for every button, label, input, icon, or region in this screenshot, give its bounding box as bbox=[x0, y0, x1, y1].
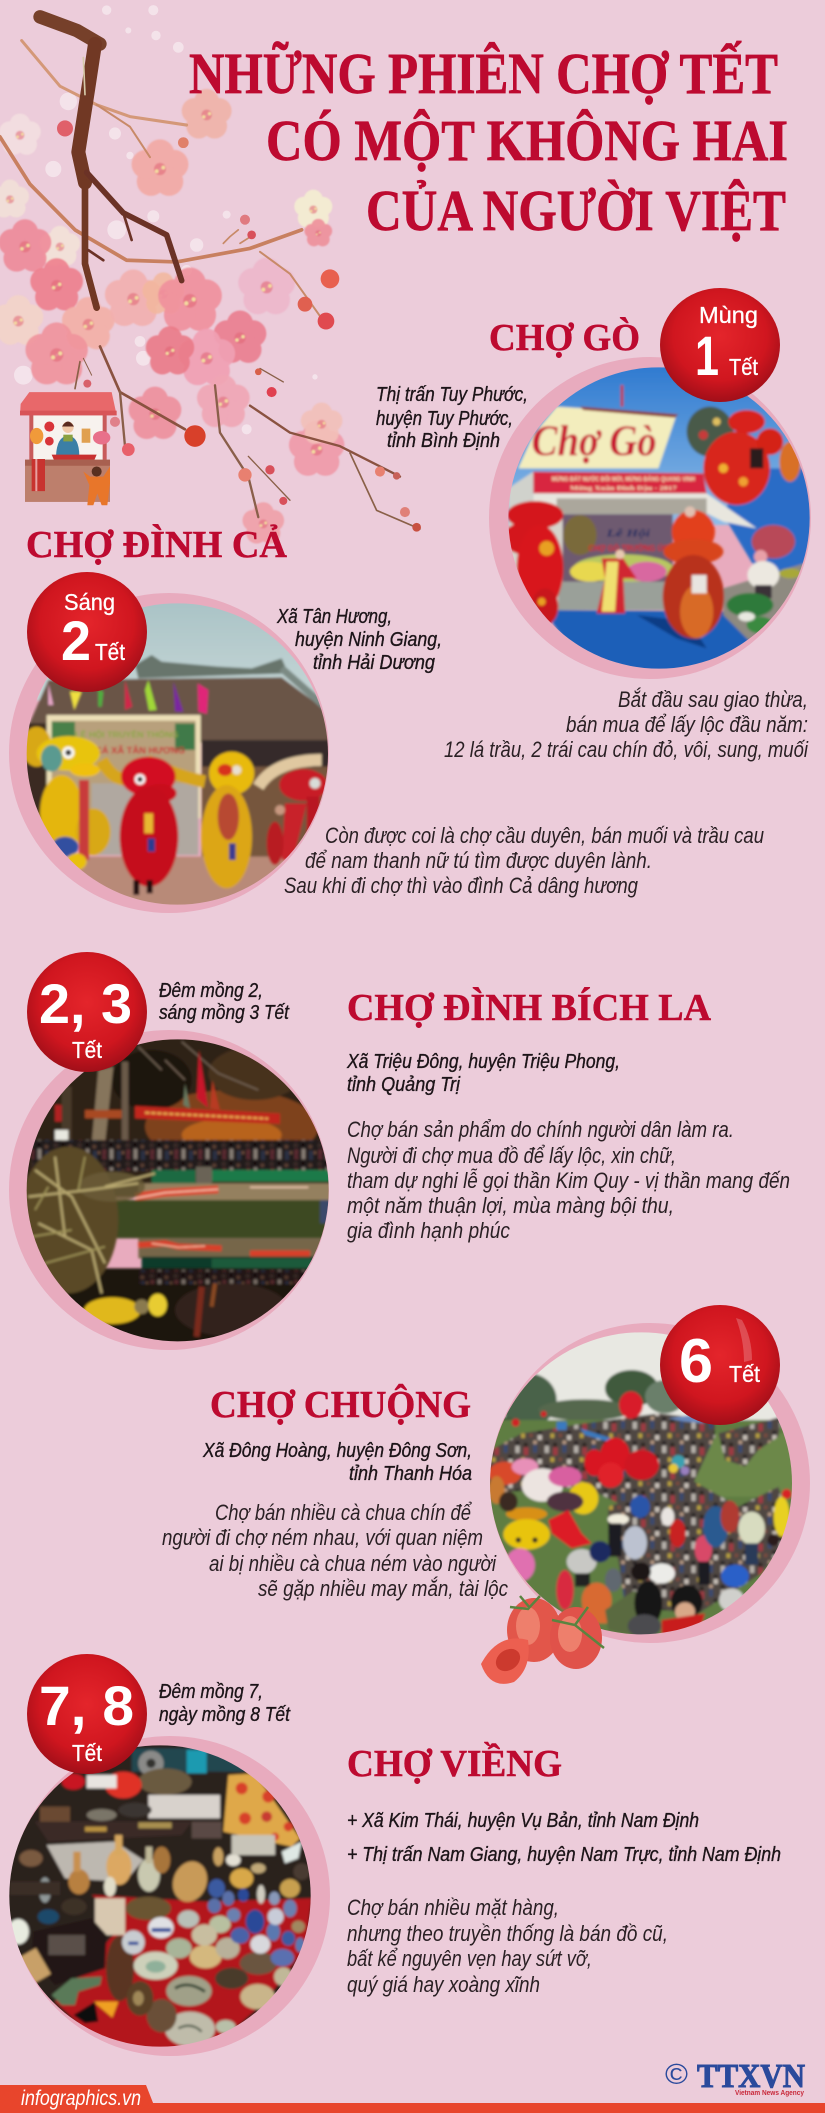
illustration: peach blossom branch bbox=[0, 5, 421, 544]
white speckles bbox=[14, 5, 318, 434]
photo ring: Chợ Viềng bbox=[10, 1736, 330, 2056]
description: Chợ Viềng bbox=[347, 1895, 668, 1997]
photo: Chợ Đình Bích La night market bbox=[18, 1037, 335, 1348]
address: Chợ Đình Cá bbox=[276, 606, 442, 674]
photo: Chợ Gò lion dance: MỪNG ĐẤT NƯỚC ĐỔI MỚI, MỪNG ĐẢNG QUANG VINH bbox=[552, 475, 695, 483]
photo ring: Chợ Đình Cá bbox=[9, 593, 329, 913]
heading: Chợ Gò: CHỢ GÒ bbox=[489, 317, 640, 359]
address: Chợ Gò: Thị trấn Tuy Phước, bbox=[376, 384, 528, 406]
address: Chợ Viềng: + Thị trấn Nam Giang, huyện Nam Trực, tỉnh Nam Định bbox=[347, 1844, 781, 1866]
description: Chợ Gò bbox=[444, 687, 809, 762]
description: Chợ Chuộng: sẽ gặp nhiều may mắn, tài lộc bbox=[258, 1576, 508, 1601]
date note: Chợ Viềng bbox=[159, 1681, 291, 1726]
heading: Chợ Viềng: CHỢ VIỀNG bbox=[347, 1742, 562, 1785]
description: Chợ Đình Bích La: gia đình hạnh phúc bbox=[347, 1218, 510, 1243]
description: Chợ Đình Bích La: Chợ bán sản phẩm do chính người dân làm ra. bbox=[347, 1117, 734, 1142]
photo: Chợ Gò lion dance: Mừng Xuân Đinh Dậu - 2017 bbox=[570, 486, 677, 492]
badge: 7, 8 Tết: 7, 8 bbox=[39, 1674, 134, 1737]
description: Chợ Chuộng: ai bị nhiều cà chua ném vào người bbox=[209, 1551, 497, 1576]
photo ring: Chợ Gò bbox=[489, 357, 811, 679]
photo: Chợ Gò lion dance bbox=[503, 365, 817, 675]
left yellow lion bbox=[22, 727, 52, 767]
badge: Sáng 2 Tết: Sáng bbox=[64, 589, 115, 615]
description: Chợ Chuộng: Chợ bán nhiều cà chua chín để bbox=[215, 1500, 472, 1525]
description: Chợ Viềng: bất kể nguyên vẹn hay sứt vỡ, bbox=[347, 1946, 592, 1971]
address: Chợ Chuộng: tỉnh Thanh Hóa bbox=[349, 1463, 472, 1485]
address: Chợ Viềng: + Xã Kim Thái, huyện Vụ Bản, tỉnh Nam Định bbox=[347, 1810, 699, 1832]
footer: infographics.vn bar bbox=[0, 2085, 825, 2113]
panel: Chợ Viềng bbox=[5, 1654, 781, 2056]
badge: 6 Tết: Tết bbox=[729, 1361, 761, 1387]
description: Chợ Chuộng: người đi chợ ném nhau, với quan niệm bbox=[162, 1525, 483, 1550]
photo: Chợ Gò lion dance: Chợ Gò bbox=[532, 417, 657, 465]
date note: Chợ Viềng: ngày mồng 8 Tết bbox=[159, 1704, 291, 1726]
right crowd and lion bbox=[687, 407, 733, 457]
badge: 6 Tết bbox=[660, 1305, 780, 1425]
centre red lion bbox=[121, 757, 176, 797]
centre yellow lion bbox=[209, 752, 254, 795]
badge: 7, 8 Tết bbox=[27, 1654, 147, 1774]
description: Chợ Viềng: quý giá hay xoàng xĩnh bbox=[347, 1972, 540, 1997]
heading: Chợ Chuộng: CHỢ CHUỘNG bbox=[210, 1383, 471, 1426]
icon: market stall bbox=[20, 392, 117, 505]
photo: Chợ Chuộng crowd bbox=[485, 1327, 798, 1640]
panel: Chợ Chuộng bbox=[162, 1305, 810, 1684]
bowls and plates bbox=[134, 1952, 178, 1980]
description: Chợ Đình Bích La: Người đi chợ mua đồ để lấy lộc, xin chữ, bbox=[347, 1143, 676, 1168]
badge: 2, 3 Tết bbox=[27, 952, 147, 1072]
photo ring: Chợ Chuộng bbox=[490, 1323, 810, 1643]
address: Chợ Gò: huyện Tuy Phước, bbox=[376, 408, 513, 430]
costume figure bbox=[597, 558, 637, 613]
badge: Sáng 2 Tết: Tết bbox=[95, 639, 126, 665]
description: Chợ Đình Bích La: một năm thuận lợi, mùa màng bội thu, bbox=[347, 1193, 674, 1218]
badge: Mùng 1 Tết: 1 bbox=[695, 324, 719, 387]
photo ring: Chợ Đình Bích La bbox=[9, 1030, 329, 1350]
address: Chợ Gò: tỉnh Bình Định bbox=[387, 430, 500, 452]
logo: TTXVN: TTXVN bbox=[697, 2058, 805, 2095]
title bbox=[189, 41, 788, 243]
photo: Chợ Gò lion dance: CHỢ GÒ TRƯỜNG ÚC bbox=[588, 542, 669, 553]
red balloons bbox=[619, 1391, 643, 1419]
panel: Chợ Đình Bích La bbox=[9, 952, 790, 1350]
illustration: tomatoes bbox=[481, 1596, 604, 1684]
address: Chợ Đình Bích La: tỉnh Quảng Trị bbox=[347, 1074, 460, 1096]
badge: 6 Tết: 6 bbox=[679, 1327, 713, 1396]
description: Chợ Chuộng bbox=[162, 1500, 508, 1601]
address: Chợ Viềng bbox=[347, 1810, 781, 1866]
badge: Sáng 2 Tết bbox=[27, 572, 147, 692]
heading: Chợ Đình Cá: CHỢ ĐÌNH CẢ bbox=[26, 524, 288, 566]
photo: Chợ Đình Cá lion dance: CÁ XÃ TÂN HƯƠNG bbox=[95, 744, 185, 755]
logo: TTXVN: © bbox=[665, 2059, 688, 2091]
vases bbox=[106, 1848, 132, 1885]
address: Chợ Đình Cá: Xã Tân Hương, bbox=[276, 606, 392, 628]
logo: TTXVN bbox=[665, 2058, 805, 2097]
description: Chợ Đình Cá: để nam thanh nữ tú tìm được duyên lành. bbox=[305, 848, 652, 873]
date note: Chợ Đình Bích La: sáng mồng 3 Tết bbox=[159, 1002, 290, 1024]
vendor and greens bbox=[754, 550, 767, 563]
badge: 2, 3 Tết: Tết bbox=[72, 1037, 103, 1063]
shelf and statue bbox=[32, 1918, 107, 1985]
badge: 2, 3 Tết: 2, 3 bbox=[39, 972, 132, 1035]
description: Chợ Viềng: Chợ bán nhiều mặt hàng, bbox=[347, 1895, 559, 1920]
photo: Chợ Gò lion dance: Lễ Hội bbox=[605, 528, 650, 539]
people bbox=[630, 1495, 650, 1518]
address: Chợ Đình Cá: huyện Ninh Giang, bbox=[295, 629, 442, 651]
address: Chợ Đình Cá: tỉnh Hải Dương bbox=[313, 652, 435, 674]
address: Chợ Chuộng bbox=[202, 1440, 472, 1485]
description: Chợ Đình Cá: Sau khi đi chợ thì vào đình Cả dâng hương bbox=[284, 873, 639, 898]
badge: 7, 8 Tết: Tết bbox=[72, 1740, 103, 1766]
description: Chợ Đình Cá bbox=[284, 823, 764, 898]
blossoms bbox=[0, 89, 344, 544]
badge: Mùng 1 Tết: Tết bbox=[729, 354, 759, 380]
panel: Chợ Đình Cá bbox=[9, 524, 764, 913]
heading: Chợ Đình Bích La: CHỢ ĐÌNH BÍCH LA bbox=[347, 987, 712, 1029]
centre lion bbox=[670, 509, 717, 544]
toy balloons bbox=[488, 1462, 522, 1485]
right red lion bbox=[258, 760, 322, 787]
date note: Chợ Đình Bích La bbox=[159, 980, 290, 1024]
badge: Mùng 1 Tết bbox=[660, 288, 780, 402]
photo: Chợ Đình Cá lion dance bbox=[22, 600, 335, 910]
photo: Chợ Viềng antiques bbox=[5, 1742, 318, 2052]
panel: Chợ Gò bbox=[376, 288, 817, 762]
date note: Chợ Viềng: Đêm mồng 7, bbox=[159, 1681, 263, 1703]
description: Chợ Viềng: nhưng theo truyền thống là bán đồ cũ, bbox=[347, 1921, 668, 1946]
date note: Chợ Đình Bích La: Đêm mồng 2, bbox=[159, 980, 263, 1002]
logo: TTXVN: Vietnam News Agency bbox=[735, 2088, 805, 2097]
address: Chợ Đình Bích La bbox=[346, 1051, 620, 1096]
address: Chợ Đình Bích La: Xã Triệu Đông, huyện Triệu Phong, bbox=[346, 1051, 620, 1073]
badge: Sáng 2 Tết: 2 bbox=[61, 609, 91, 672]
trunk bbox=[40, 17, 182, 308]
footer: infographics.vn bar: infographics.vn bbox=[21, 2087, 141, 2110]
branches bbox=[0, 41, 420, 529]
description: Chợ Đình Bích La bbox=[347, 1117, 790, 1243]
badge: Mùng 1 Tết: Mùng bbox=[699, 302, 758, 328]
left lion bbox=[507, 501, 563, 529]
address: Chợ Chuộng: Xã Đông Hoàng, huyện Đông Sơn, bbox=[202, 1440, 472, 1462]
photo: Chợ Đình Cá lion dance: LỄ HỘI TRUYỀN THỐNG bbox=[75, 729, 178, 739]
buds bbox=[57, 120, 421, 532]
address: Chợ Gò bbox=[376, 384, 528, 452]
